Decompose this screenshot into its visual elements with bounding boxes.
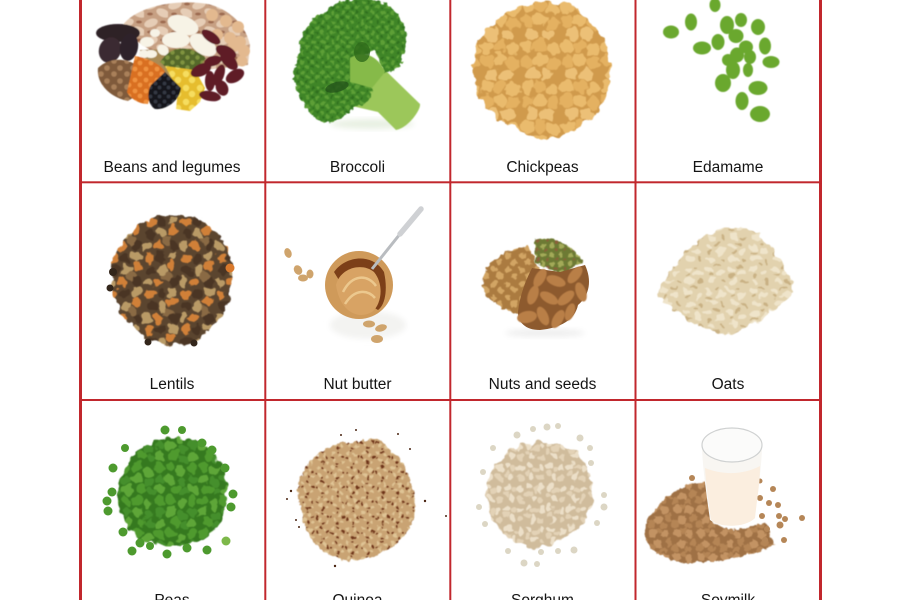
- panel: edamame: [663, 0, 780, 176]
- icon: sorghum pile: [476, 423, 608, 567]
- icon: chickpeas pile: [473, 2, 610, 139]
- icon: lentils pile: [106, 214, 234, 346]
- panel: peas: [102, 426, 238, 600]
- panel: beans and legumes: [95, 2, 250, 176]
- panel: nuts and seeds: [483, 238, 597, 393]
- label: Nuts and seeds: [489, 376, 597, 393]
- icon: nuts and seeds pile: [483, 238, 589, 337]
- icon: nut butter jar with spoon: [283, 209, 421, 343]
- panel: broccoli: [293, 0, 420, 176]
- icon: oats pile: [659, 228, 792, 335]
- panel: oats: [659, 228, 792, 393]
- label: Lentils: [150, 376, 195, 393]
- panel: soymilk: [645, 428, 805, 600]
- icon: broccoli: [293, 0, 420, 130]
- panel: sorghum: [476, 423, 608, 600]
- icon: edamame beans: [663, 0, 780, 122]
- label: Beans and legumes: [103, 159, 241, 176]
- panel: quinoa: [286, 429, 447, 600]
- label: Edamame: [693, 159, 763, 176]
- label: Oats: [712, 376, 745, 393]
- icon: pile of beans and legumes: [95, 2, 250, 111]
- panel: nut butter: [283, 209, 421, 393]
- icon: glass of soymilk and soybeans: [645, 428, 805, 563]
- panel: lentils: [106, 214, 234, 393]
- label: Broccoli: [330, 159, 385, 176]
- panel: chickpeas: [473, 2, 610, 176]
- icon: peas pile: [102, 426, 238, 558]
- label: Chickpeas: [506, 159, 579, 176]
- icon: quinoa pile: [286, 429, 447, 567]
- label: Nut butter: [323, 376, 392, 393]
